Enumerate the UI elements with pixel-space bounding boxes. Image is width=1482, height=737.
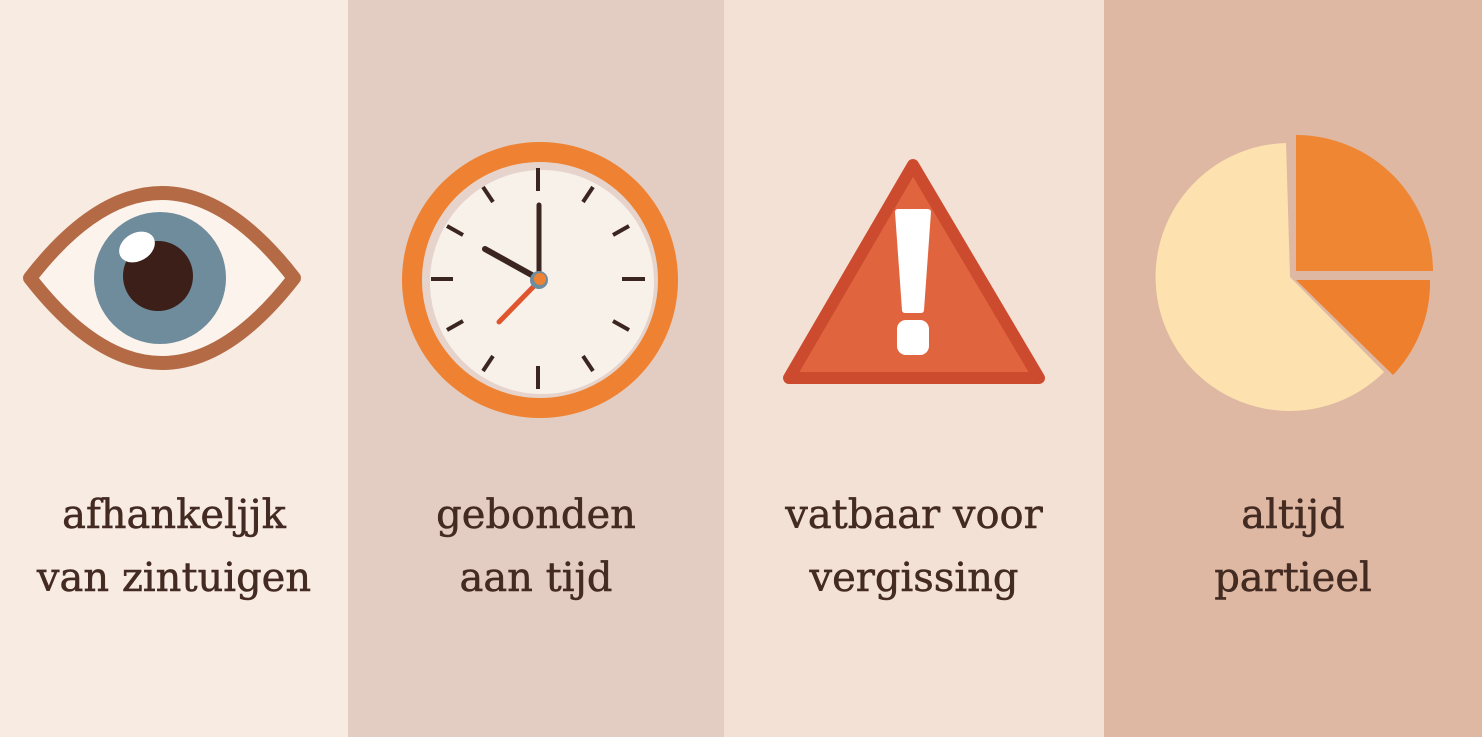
panel: error	[724, 0, 1104, 737]
text: vatbaar voor vergissing: vatbaar voor	[785, 492, 1043, 538]
panel: partial	[1104, 0, 1482, 737]
icon: warning triangle	[789, 165, 1039, 378]
icon: pie chart	[1156, 135, 1433, 411]
text: altijd partieel: altijd	[1241, 492, 1345, 538]
text: altijd partieel	[1214, 492, 1372, 601]
text: gebonden aan tijd: gebonden	[436, 492, 636, 538]
panel: senses	[0, 0, 348, 737]
text: afhankelijk van zintuigen	[36, 492, 311, 601]
icon: clock	[402, 142, 678, 418]
panel: time	[348, 0, 724, 737]
text: altijd partieel: partieel	[1214, 555, 1372, 601]
text: afhankelijk van zintuigen: van zintuigen	[37, 555, 311, 601]
text: afhankelijk van zintuigen: afhankeljjk	[62, 492, 286, 538]
text: vatbaar voor vergissing	[784, 492, 1043, 601]
text: gebonden aan tijd	[436, 492, 636, 601]
text: vatbaar voor vergissing: vergissing	[809, 555, 1018, 601]
text: gebonden aan tijd: aan tijd	[459, 555, 613, 601]
icon: eye	[30, 193, 294, 363]
